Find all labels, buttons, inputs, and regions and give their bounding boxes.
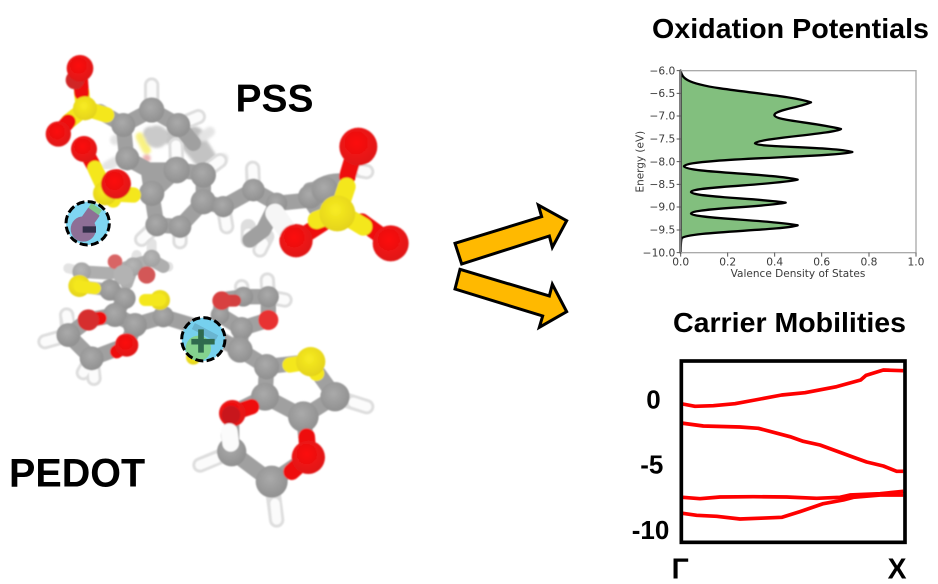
faded rear atoms of PSS bbox=[107, 125, 223, 167]
y axis labels: −10.0 bbox=[643, 246, 676, 259]
y axis labels: −8.5 bbox=[649, 178, 675, 191]
positive charge marker bbox=[182, 318, 225, 361]
axes frame bbox=[681, 71, 916, 253]
chart: band structure bbox=[632, 361, 907, 584]
arrow: to oxidation potentials bbox=[455, 205, 567, 264]
x axis labels bbox=[672, 553, 907, 584]
x axis labels bbox=[672, 256, 925, 269]
y axis labels: −8.0 bbox=[649, 155, 676, 168]
x axis labels: 0.8 bbox=[861, 256, 878, 269]
y axis title: Energy (eV) bbox=[634, 131, 647, 192]
x axis labels: 0.0 bbox=[672, 256, 689, 269]
x axis labels: 0.6 bbox=[813, 256, 830, 269]
heading: Carrier Mobilities: Carrier Mobilities bbox=[673, 307, 906, 338]
PSS hydrogens bbox=[142, 85, 367, 250]
label: PEDOT: PEDOT bbox=[9, 452, 145, 496]
y axis labels: −9.0 bbox=[649, 201, 676, 214]
rear PEDOT unit bbox=[68, 243, 168, 298]
molecule: PEDOT bbox=[45, 243, 367, 520]
y axis labels bbox=[632, 384, 669, 545]
PSS carbon skeleton bbox=[100, 97, 345, 240]
y axis labels: 0 bbox=[646, 384, 661, 414]
PEDOT carbon skeleton bbox=[56, 279, 350, 498]
y axis labels: -5 bbox=[640, 449, 663, 479]
x axis labels: 0.4 bbox=[766, 256, 783, 269]
y axis labels: −9.5 bbox=[649, 224, 675, 237]
label: PSS: PSS bbox=[236, 78, 314, 120]
arrow: to carrier mobilities bbox=[455, 269, 567, 327]
x axis labels: 0.2 bbox=[719, 256, 736, 269]
y axis labels: -10 bbox=[632, 515, 669, 545]
chart: valence density of states bbox=[634, 64, 925, 280]
arrows bbox=[455, 205, 567, 327]
PSS sulfonate groups bbox=[46, 55, 409, 261]
plot frame bbox=[681, 361, 905, 542]
y axis labels: −6.0 bbox=[649, 64, 676, 77]
y axis labels: −7.0 bbox=[649, 110, 676, 123]
filled density curve bbox=[681, 71, 852, 253]
x axis labels: 1.0 bbox=[908, 256, 925, 269]
tick marks bbox=[677, 71, 916, 257]
y axis labels: −6.5 bbox=[649, 87, 675, 100]
molecule: PSS bbox=[46, 55, 409, 261]
x axis title: Valence Density of States bbox=[731, 267, 866, 280]
negative charge marker bbox=[66, 202, 109, 245]
y axis labels: −7.5 bbox=[649, 133, 675, 146]
heading: Oxidation Potentials: Oxidation Potentials bbox=[652, 13, 929, 44]
PEDOT hydrogens bbox=[45, 280, 367, 520]
y axis labels bbox=[643, 64, 676, 259]
PEDOT oxygen and sulfur atoms bbox=[68, 275, 325, 474]
band curves bbox=[681, 370, 903, 519]
